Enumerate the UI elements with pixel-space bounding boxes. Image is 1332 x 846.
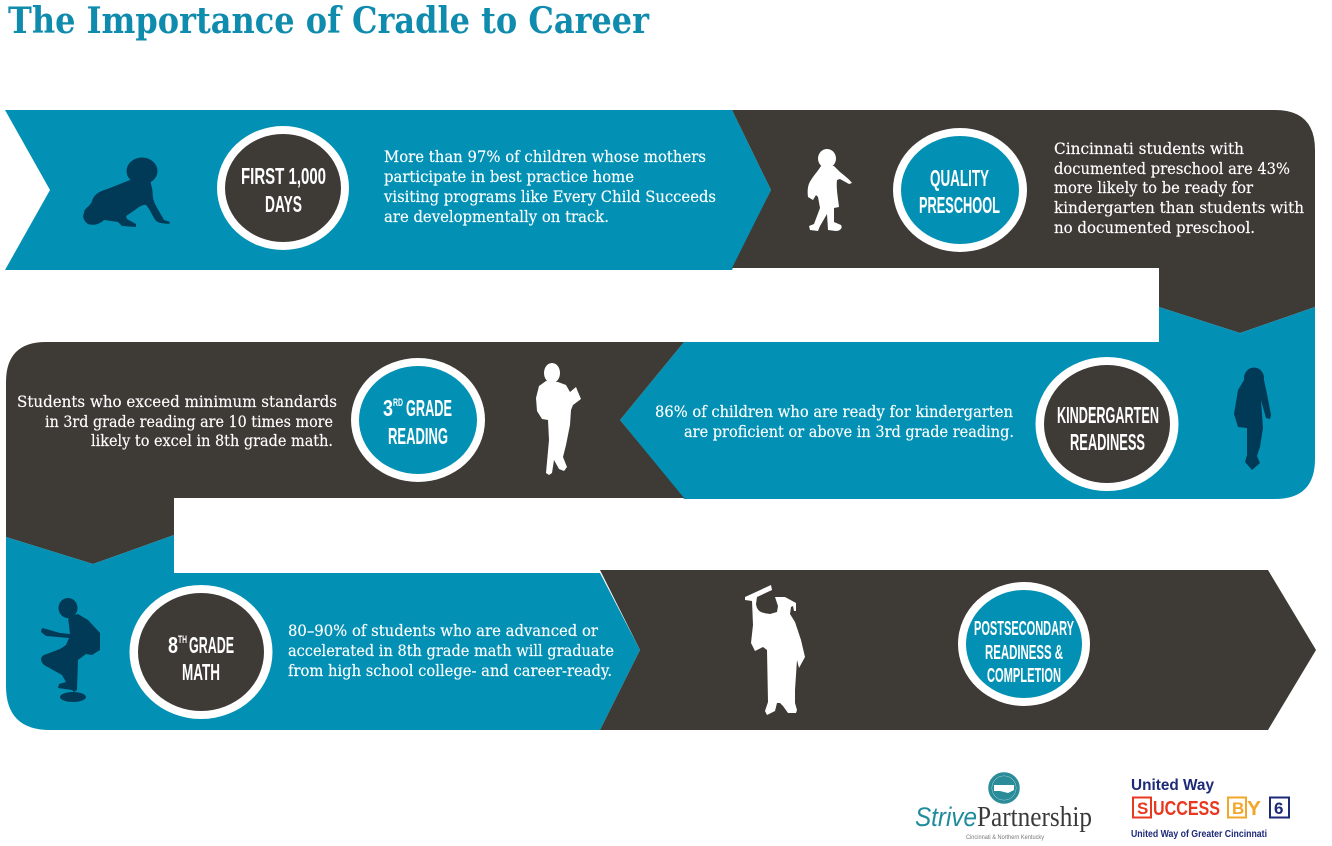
panel: 8th grade math (6, 535, 640, 730)
text: quality preschool: no documented preschool. (1054, 219, 1255, 237)
logo: Strive Partnership: Strive (915, 802, 977, 832)
title: The Importance of Cradle to Career (8, 0, 650, 42)
badge: first 1,000 days: DAYS (265, 191, 302, 217)
text: 3rd grade reading: likely to excel in 8th grade math. (91, 432, 333, 450)
badge: kindergarten readiness (1036, 357, 1178, 491)
badge: first 1,000 days (217, 126, 349, 250)
panel: 3rd grade reading (6, 342, 684, 564)
badge: 8th grade math: TH (178, 634, 187, 646)
logo: United Way Success By 6: B (1232, 799, 1244, 818)
text: quality preschool: kindergarten than students with (1054, 199, 1304, 217)
text: quality preschool: Cincinnati students with (1054, 140, 1244, 158)
badge: quality preschool: QUALITY (930, 165, 989, 191)
text: 8th grade math (288, 622, 614, 680)
badge: postsecondary: COMPLETION (987, 665, 1061, 687)
text: first 1,000 days: visiting programs like Every Child Succeeds (383, 188, 716, 206)
icon: crawling baby (83, 158, 170, 227)
badge: postsecondary: POSTSECONDARY (974, 618, 1074, 640)
band: postsecondary (600, 570, 1316, 730)
badge: 3rd grade reading: RD (393, 397, 403, 409)
logo: United Way Success By 6: S (1137, 799, 1148, 818)
badge: postsecondary (958, 582, 1090, 706)
logo: United Way Success By 6: United Way of Greater Cincinnati (1131, 829, 1267, 840)
badge: 3rd grade reading (351, 358, 485, 482)
logo: Strive Partnership: Cincinnati & Northern Kentucky (966, 835, 1044, 841)
band: quality preschool (732, 110, 1315, 333)
panel: first 1,000 days (5, 110, 771, 270)
logo: United Way Success By 6: Y (1247, 798, 1262, 820)
text: 3rd grade reading (17, 393, 337, 450)
icon: girl walking (1234, 368, 1271, 470)
badge: 8th grade math: MATH (182, 659, 220, 685)
text: first 1,000 days: are developmentally on track. (384, 208, 609, 226)
badge: kindergarten readiness: READINESS (1070, 429, 1145, 455)
text: kindergarten readiness: 86% of children who are ready for kindergarten (655, 403, 1013, 421)
band: 3rd grade reading (6, 342, 684, 564)
badge: first 1,000 days: FIRST 1,000 (241, 163, 326, 189)
text: 8th grade math: accelerated in 8th grade math will graduate (288, 642, 614, 660)
badge: 8th grade math: 8 (168, 632, 178, 658)
text: quality preschool: more likely to be ready for (1054, 179, 1254, 197)
text: first 1,000 days: participate in best practice home (384, 168, 634, 186)
badge: 8th grade math: GRADE (189, 632, 234, 658)
panel: kindergarten readiness (620, 307, 1315, 499)
panel: postsecondary readiness and completion (600, 570, 1316, 730)
band: 8th grade math (6, 535, 640, 730)
badge: postsecondary: READINESS & (985, 642, 1063, 664)
badge: 8th grade math (130, 585, 272, 719)
icon: student with books (536, 363, 581, 475)
badge: quality preschool: PRESCHOOL (919, 192, 1000, 218)
text: kindergarten readiness: are proficient or above in 3rd grade reading. (684, 423, 1014, 441)
logo: United Way Success By 6 (1131, 777, 1289, 840)
badge: 3rd grade reading: GRADE (406, 395, 452, 421)
text: quality preschool (1054, 140, 1304, 237)
text: 8th grade math: 80–90% of students who are advanced or (288, 622, 599, 640)
badge: 3rd grade reading: 3 (383, 395, 393, 421)
band: first 1,000 days (5, 110, 771, 270)
text: first 1,000 days (383, 148, 716, 226)
logo: Strive Partnership: Partnership (977, 802, 1092, 833)
badge: kindergarten readiness: KINDERGARTEN (1057, 402, 1159, 428)
text: 8th grade math: from high school college- and career-ready. (288, 662, 612, 680)
logo: United Way Success By 6: UCCESS (1153, 798, 1220, 820)
logo: United Way Success By 6: United Way (1131, 777, 1214, 794)
icon: graduate (745, 585, 805, 715)
band: kindergarten readiness (620, 307, 1315, 499)
text: kindergarten readiness (655, 403, 1014, 441)
text: first 1,000 days: More than 97% of children whose mothers (384, 148, 706, 166)
badge: quality preschool (893, 128, 1027, 252)
text: 3rd grade reading: in 3rd grade reading are 10 times more (45, 413, 333, 431)
text: quality preschool: documented preschool are 43% (1054, 160, 1290, 178)
badge: 3rd grade reading: READING (388, 423, 448, 449)
logo: United Way Success By 6: 6 (1274, 799, 1283, 818)
panel: quality preschool (732, 110, 1315, 333)
icon: toddler (808, 149, 852, 231)
logo: Strive Partnership (915, 774, 1092, 841)
icon: boy on stool (41, 598, 100, 702)
text: 3rd grade reading: Students who exceed minimum standards (17, 393, 337, 411)
